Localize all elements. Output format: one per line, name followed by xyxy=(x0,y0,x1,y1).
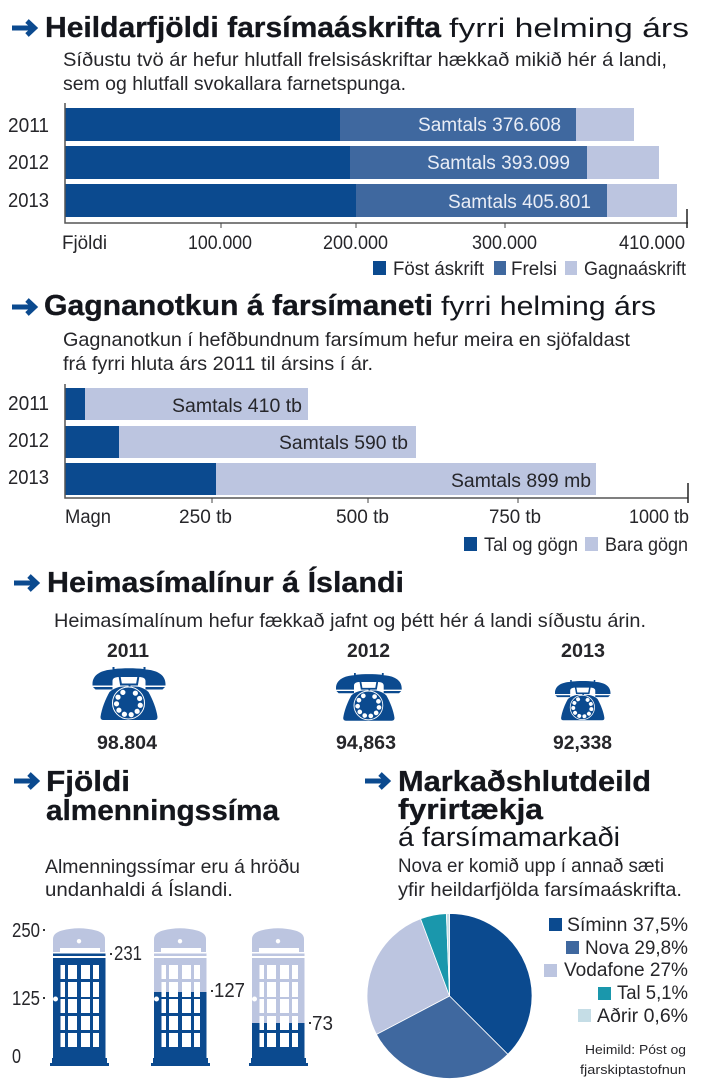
bar chart: data usage by year: Samtals 590 tb xyxy=(279,433,408,454)
legend: subscription types: Frelsi xyxy=(511,259,557,280)
bar chart: data usage by year: 500 tb xyxy=(336,507,389,528)
legend: data types xyxy=(464,535,688,556)
icon: phone box value 73 xyxy=(249,928,333,1066)
bar chart: subscriptions by year: Samtals 405.801 xyxy=(448,192,591,213)
arrow: section 1 xyxy=(12,21,34,35)
arrow: section 4 xyxy=(14,774,36,788)
landlines 2011: 2011 xyxy=(107,641,149,662)
bar chart: data usage by year: Samtals 410 tb xyxy=(172,396,302,417)
heading: market share: á farsímamarkaði xyxy=(398,822,620,852)
bar chart: subscriptions by year: 410.000 xyxy=(619,233,685,254)
bar chart: subscriptions by year: 2013 xyxy=(8,190,49,212)
panel: mobile data usage xyxy=(8,290,689,556)
bar chart: subscriptions by year: Samtals 376.608 xyxy=(418,115,561,136)
source note xyxy=(580,1042,686,1077)
landlines 2012: 94,863 xyxy=(336,733,396,754)
heading: market share: fyrirtækja xyxy=(398,794,544,826)
icon: phone box value 231 xyxy=(50,928,142,1066)
bar chart: subscriptions by year: 300.000 xyxy=(472,233,537,254)
bar chart: data usage by year: 2011 xyxy=(8,393,49,415)
text block: data usage intro: frá fyrri hluta árs 2011 til ársins í ár. xyxy=(63,353,373,375)
legend: data types: Tal og gögn xyxy=(484,535,578,556)
panel: landlines xyxy=(14,565,646,754)
legend: subscription types xyxy=(373,259,687,280)
legend: data types: Bara gögn xyxy=(605,535,688,556)
text block: public phones intro xyxy=(45,856,300,901)
icon: phone box value 73: 73 xyxy=(312,1013,333,1035)
bar chart: data usage by year: 750 tb xyxy=(489,507,541,528)
heading: public phones: Fjöldi xyxy=(46,766,130,798)
text block: subscriptions intro xyxy=(63,49,667,95)
icon: telephone 2013 xyxy=(555,680,610,720)
panel: public phones xyxy=(12,766,333,1068)
axis: public phones scale: 125 xyxy=(12,988,40,1010)
heading: data usage: Gagnanotkun á farsímaneti xyxy=(44,290,433,322)
text block: public phones intro: Almenningssímar eru á hröðu xyxy=(45,856,300,878)
axis: public phones scale xyxy=(12,920,45,1068)
heading: data usage xyxy=(44,290,656,322)
bar chart: data usage by year: Samtals 899 mb xyxy=(451,471,591,492)
landlines 2013: 92,338 xyxy=(553,733,612,754)
text block: data usage intro: Gagnanotkun í hefðbundnum farsímum hefur meira en sjöfaldast xyxy=(63,329,631,351)
axis: public phones scale: 250 xyxy=(12,920,40,942)
heading: landlines: Heimasímalínur á Íslandi xyxy=(47,565,404,599)
icon: phone box value 231: 231 xyxy=(114,943,142,965)
landlines 2013 xyxy=(553,641,612,754)
bar chart: data usage by year: Magn xyxy=(65,507,111,528)
landlines 2011: 98.804 xyxy=(97,733,157,754)
icon: telephone 2012 xyxy=(336,673,402,721)
landlines 2012: 2012 xyxy=(347,641,390,662)
bar chart: subscriptions by year: 2012 xyxy=(8,152,49,174)
bar chart: subscriptions by year: Samtals 393.099 xyxy=(427,153,570,174)
heading: public phones xyxy=(46,766,280,827)
panel: total mobile subscriptions xyxy=(8,12,689,280)
icon: phone box value 127: 127 xyxy=(214,980,245,1002)
bar chart: subscriptions by year xyxy=(8,103,688,254)
bar chart: data usage by year xyxy=(8,384,689,528)
icon: telephone 2011 xyxy=(92,667,166,720)
heading: total subscriptions xyxy=(45,12,689,44)
legend: subscription types: Föst áskrift xyxy=(393,259,485,280)
text block: public phones intro: undanhaldi á Íslandi. xyxy=(45,878,233,901)
heading: market share xyxy=(398,766,651,852)
arrow: section 5 xyxy=(365,774,388,788)
legend: market share: Aðrir 0,6% xyxy=(597,1006,688,1027)
text block: subscriptions intro: Síðustu tvö ár hefur hlutfall frelsisáskriftar hækkað mikið hér á landi, xyxy=(63,49,667,71)
text block: market share intro xyxy=(398,855,682,901)
legend: subscription types: Gagnaáskrift xyxy=(584,259,687,280)
bar chart: data usage by year: 250 tb xyxy=(179,507,232,528)
legend: market share: Nova 29,8% xyxy=(585,938,688,959)
bar chart: subscriptions by year: Fjöldi xyxy=(62,233,107,254)
icon: phone box value 127 xyxy=(151,928,245,1066)
text block: landlines intro: Heimasímalínum hefur fækkað jafnt og þétt hér á landi síðustu árin. xyxy=(54,610,646,632)
heading: data usage: fyrri helming árs xyxy=(441,291,656,321)
text block: data usage intro xyxy=(63,329,631,375)
bar chart: data usage by year: 1000 tb xyxy=(629,507,689,528)
heading: market share: Markaðshlutdeild xyxy=(398,766,651,798)
source note: fjarskiptastofnun xyxy=(580,1062,686,1077)
arrow: section 2 xyxy=(12,300,34,314)
bar chart: subscriptions by year: 200.000 xyxy=(323,233,388,254)
legend: market share xyxy=(544,915,688,1027)
heading: public phones: almenningssíma xyxy=(46,795,280,827)
text block: market share intro: yfir heildarfjölda farsímaáskrifta. xyxy=(398,879,682,901)
bar chart: data usage by year: 2012 xyxy=(8,430,49,452)
panel: market share xyxy=(365,766,688,1079)
landlines 2013: 2013 xyxy=(561,641,605,662)
source note: Heimild: Póst og xyxy=(585,1042,686,1057)
bar chart: subscriptions by year: 2011 xyxy=(8,115,49,137)
text block: subscriptions intro: sem og hlutfall svokallara farnetspunga. xyxy=(63,73,406,95)
heading: total subscriptions: fyrri helming árs xyxy=(449,13,689,43)
bar chart: subscriptions by year: 100.000 xyxy=(188,233,252,254)
legend: market share: Tal 5,1% xyxy=(617,983,688,1004)
arrow: section 3 xyxy=(14,576,36,590)
landlines 2012 xyxy=(336,641,402,754)
text block: market share intro: Nova er komið upp í annað sæti xyxy=(398,855,664,877)
bar chart: data usage by year: 2013 xyxy=(8,467,49,489)
axis: public phones scale: 0 xyxy=(12,1046,21,1068)
landlines 2011 xyxy=(92,641,166,754)
legend: market share: Vodafone 27% xyxy=(564,960,688,981)
pie chart: market share xyxy=(367,914,532,1079)
heading: total subscriptions: Heildarfjöldi farsímaáskrifta xyxy=(45,12,442,44)
legend: market share: Síminn 37,5% xyxy=(567,915,688,936)
